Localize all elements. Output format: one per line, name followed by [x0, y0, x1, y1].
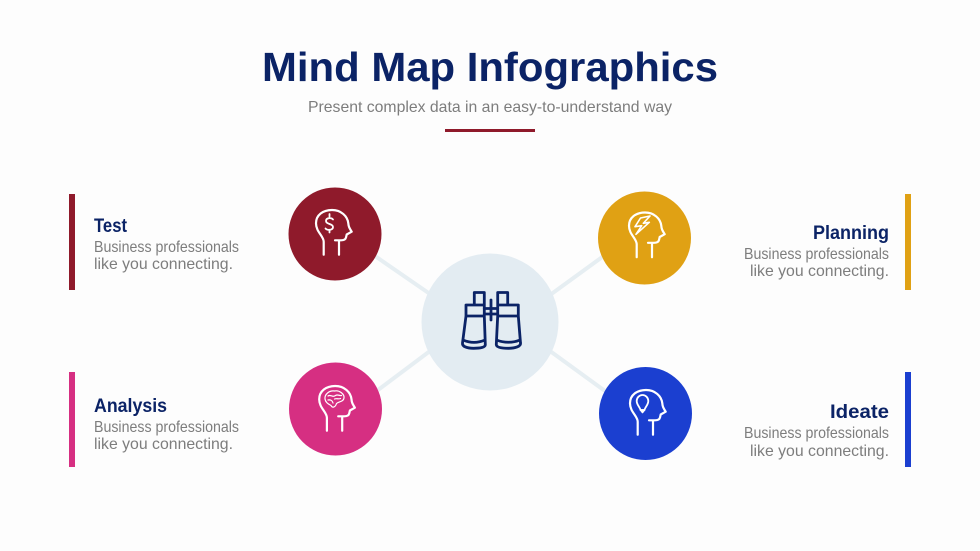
- node: Ideate: [599, 367, 692, 460]
- panel: Analysis: like you connecting.: [94, 436, 233, 453]
- panel: Planning: Planning: [813, 223, 889, 244]
- panel: Analysis: Analysis: [94, 396, 167, 417]
- icon: head with lightbulb: [630, 390, 666, 435]
- panel: Test: like you connecting.: [94, 256, 233, 273]
- panel: Analysis: [69, 372, 239, 467]
- node: Test: [288, 188, 382, 280]
- icon: head with dollar: [316, 210, 352, 255]
- center node: binoculars: [422, 254, 558, 390]
- title: Mind Map Infographics: [262, 44, 718, 90]
- node: Analysis: [289, 362, 382, 456]
- panel: Ideate: Ideate: [830, 402, 889, 423]
- panel: Ideate: Business professionals: [744, 425, 889, 442]
- panel: Planning: Business professionals: [744, 246, 889, 263]
- panel: Planning: [744, 194, 911, 290]
- panel: Test: [69, 194, 239, 290]
- panel: Analysis: Business professionals: [94, 419, 239, 436]
- icon: binoculars: [462, 292, 521, 348]
- title underline: [445, 129, 535, 132]
- panel: Planning: like you connecting.: [750, 263, 889, 280]
- node: Planning: [598, 192, 691, 284]
- icon: head with lightning bolt: [629, 212, 665, 257]
- panel: Test: Test: [94, 216, 128, 237]
- panel: Ideate: [744, 372, 911, 467]
- subtitle: Present complex data in an easy-to-understand way: [308, 99, 672, 116]
- connector lines: [375, 255, 605, 391]
- panel: Ideate: like you connecting.: [750, 443, 889, 460]
- panel: Test: Business professionals: [94, 239, 239, 256]
- icon: head with brain: [319, 386, 355, 431]
